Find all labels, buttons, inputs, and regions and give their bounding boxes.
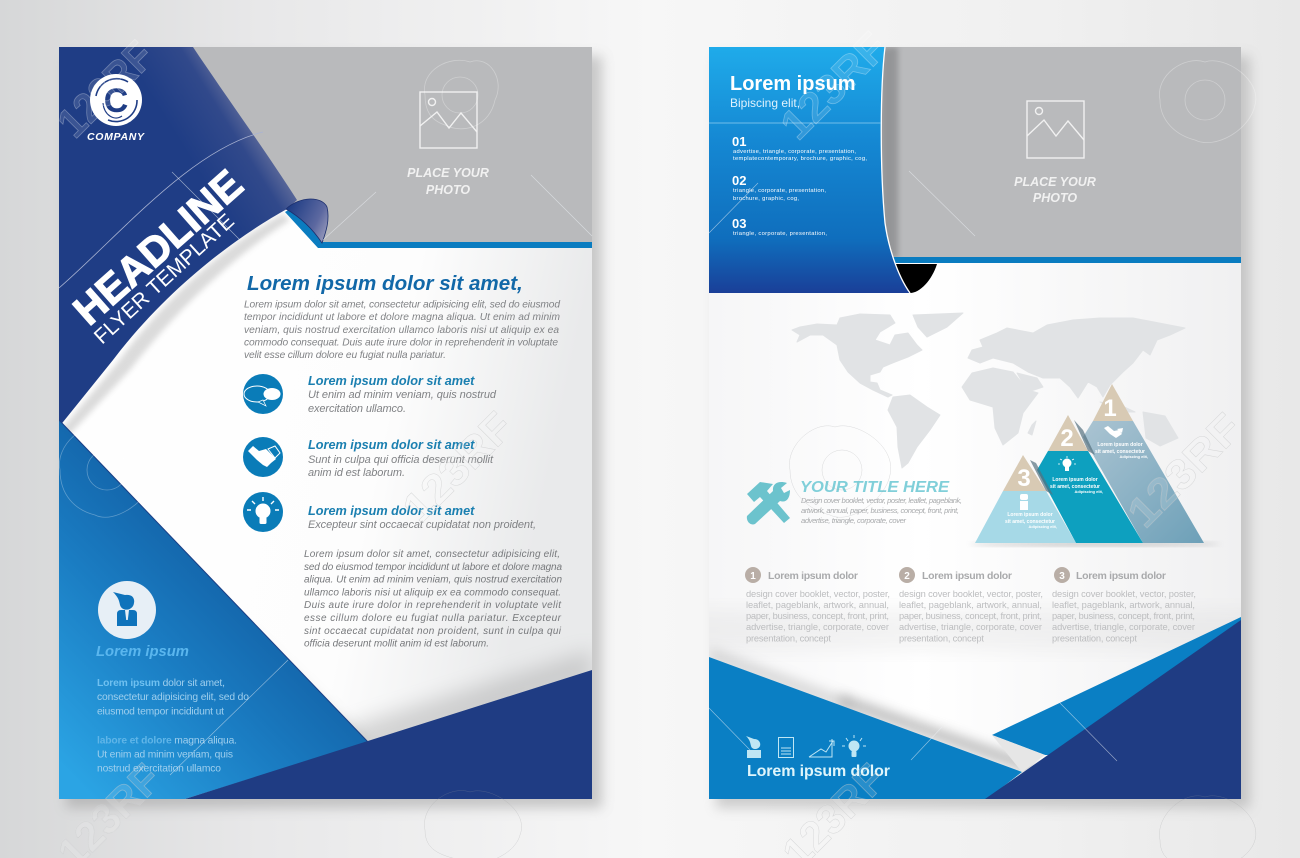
blue lower-left band: [709, 657, 1022, 799]
black fold: [892, 264, 937, 293]
intro paragraph: veniam, quis nostrud exercitation ullamco laboris nisi ut aliquip ex ea: [244, 325, 559, 336]
feature 3 text: Excepteur sint occaecat cupidatat non proident,: [308, 519, 536, 531]
lower-left text: [97, 678, 249, 774]
icon: speech bubbles: [243, 374, 283, 414]
pyramid 1: sit amet, consectetur: [1095, 449, 1145, 455]
pyramid 2: [1037, 415, 1143, 543]
photo caption: right: PLACE YOUR: [1014, 175, 1096, 189]
accent bar: right: [890, 257, 1241, 263]
photo caption: left: PLACE YOUR: [407, 166, 489, 180]
feature 2 text: Sunt in culpa qui officia deserunt mollit: [308, 454, 494, 466]
photo caption: right: PHOTO: [1033, 191, 1077, 205]
column 1: [745, 567, 890, 644]
bottom caption: Lorem ipsum dolor: [747, 763, 890, 780]
world map: [792, 313, 1185, 468]
lower-left text: labore et dolore magna aliqua.: [97, 736, 237, 746]
pyramid 3: sit amet, consectetur: [1005, 519, 1055, 525]
infographic title: YOUR TITLE HERE: [800, 479, 950, 496]
long paragraph: ullamco laboris nisi ut aliquip ex ea commodo consequat.: [304, 588, 561, 598]
column 3: advertise, triangle, corporate, cover: [1052, 622, 1195, 632]
photo placeholder icon: left: [420, 92, 477, 148]
feature 3 text: [308, 504, 536, 531]
fold edge: [881, 47, 910, 293]
column 3: Lorem ipsum dolor: [1076, 570, 1166, 582]
column 3: presentation, concept: [1052, 634, 1137, 644]
column 3: leaflet, pageblank, artwork, annual,: [1052, 600, 1195, 610]
watermarks: light background outline: 123RF: [1118, 404, 1250, 536]
intro paragraph: [244, 300, 560, 361]
column 3: 3: [1059, 571, 1065, 582]
icon: person: [98, 581, 156, 639]
blue lower-left panel: [59, 420, 368, 799]
header list: templatecontemporary, brochure, graphic, cog,: [733, 156, 867, 162]
feature 2 text: [308, 438, 494, 479]
long paragraph: aliqua. Ut enim ad minim veniam, quis nostrud exercitation: [304, 574, 562, 586]
headline: HEADLINE: [64, 161, 251, 334]
infographic description: artwork, annual, paper, business, concept, front, print,: [801, 506, 959, 515]
lower-left heading: Lorem ipsum: [96, 644, 189, 660]
photo caption: left: PHOTO: [426, 183, 470, 197]
long paragraph: [304, 549, 562, 650]
curl tip: [286, 199, 328, 243]
bottom edge shadow: [348, 649, 592, 741]
column 1: Lorem ipsum dolor: [768, 570, 858, 582]
pyramid 3: Adipiscing elit,: [1029, 524, 1057, 529]
left page shadow: [66, 56, 602, 808]
icon: tools: [747, 482, 790, 524]
column 3: paper, business, concept, front, print,: [1052, 611, 1195, 621]
header list: brochure, graphic, cog,: [733, 196, 799, 202]
logo: C: [104, 82, 128, 120]
panel: left flyer page: [59, 47, 592, 799]
intro paragraph: velit esse cillum dolore eu fugiat nulla pariatur.: [244, 350, 446, 361]
icon: light bulb: [243, 492, 283, 532]
intro paragraph: tempor incididunt ut labore et dolore magna aliqua. Ut enim ad minim: [244, 312, 560, 323]
pyramid 2: sit amet, consectetur: [1050, 484, 1100, 490]
blue header panel: [709, 47, 910, 293]
pyramid 2: 2: [1060, 425, 1074, 452]
header list: triangle, corporate, presentation,: [733, 231, 827, 237]
lower-left text: eiusmod tempor incididunt ut: [97, 706, 224, 718]
curl shadow: [59, 214, 290, 446]
navy lower-right panel: [185, 670, 592, 799]
column 2: presentation, concept: [899, 634, 984, 644]
blue wedge: [992, 617, 1241, 755]
feature 1 text: Lorem ipsum dolor sit amet: [308, 374, 475, 388]
curl line: [59, 132, 263, 288]
header subtitle: Bipiscing elit,: [730, 96, 800, 110]
navy folded corner: [59, 47, 297, 427]
fold shade: [992, 735, 1045, 772]
long paragraph: sed do eiusmod tempor incididunt ut labore et dolore magna: [304, 562, 562, 573]
long paragraph: sint occaecat cupidatat non proident, sunt in culpa qui: [304, 626, 562, 637]
blue triangle shadow: [230, 630, 372, 760]
pyramid 2: Adipiscing elit,: [1075, 489, 1103, 494]
bottom icons: [746, 735, 866, 758]
column 1: presentation, concept: [746, 634, 831, 644]
logo: [90, 74, 142, 126]
left band soft shadow: [709, 648, 850, 712]
column 2: 2: [904, 571, 910, 582]
feature 3 text: Lorem ipsum dolor sit amet: [308, 504, 475, 518]
feature 2 text: Lorem ipsum dolor sit amet: [308, 438, 475, 452]
blue panel edge line: [59, 420, 368, 742]
long paragraph: officia deserunt mollit anim id est laborum.: [304, 638, 489, 650]
column 2: advertise, triangle, corporate, cover: [899, 622, 1042, 632]
column 1: paper, business, concept, front, print,: [746, 611, 889, 621]
long paragraph: Duis aute irure dolor in reprehenderit in voluptate velit: [304, 600, 562, 611]
header divider: [709, 122, 881, 124]
column 3: design cover booklet, vector, poster,: [1052, 589, 1196, 599]
main heading: Lorem ipsum dolor sit amet,: [247, 272, 523, 295]
watermarks: 123RF: [48, 32, 163, 146]
pyramid shadow: [970, 542, 1220, 546]
pyramid 1: Adipiscing elit,: [1120, 454, 1148, 459]
feature 2 text: anim id est laborum.: [308, 467, 405, 479]
header list: triangle, corporate, presentation,: [733, 188, 826, 194]
header list: advertise, triangle, corporate, presentation,: [733, 149, 856, 155]
infographic description: [801, 496, 962, 525]
pyramid 3: [975, 455, 1076, 543]
lower-left text: Lorem ipsum dolor sit amet,: [97, 678, 225, 689]
left band shadow: [840, 695, 1040, 775]
column 1: advertise, triangle, corporate, cover: [746, 622, 889, 632]
icon: handshake: [243, 437, 283, 477]
watermarks: light background outline: 123RF: [393, 403, 522, 531]
lower-left text: consectetur adipisicing elit, sed do: [97, 692, 249, 703]
lower shadow wash: [709, 614, 1192, 646]
column 2: design cover booklet, vector, poster,: [899, 589, 1043, 599]
watermarks: 123RF: [1118, 404, 1250, 536]
company name: COMPANY: [87, 131, 145, 143]
header title: Lorem ipsum: [730, 73, 856, 95]
watermarks: 123RF: [771, 23, 896, 148]
column 2: Lorem ipsum dolor: [922, 570, 1012, 582]
navy lower-right band: [985, 620, 1241, 799]
long paragraph: Lorem ipsum dolor sit amet, consectetur adipisicing elit,: [304, 549, 560, 560]
header list: [732, 134, 867, 237]
photo panel: left: [180, 47, 592, 243]
infographic description: Design cover booklet, vector, poster, leaflet, pageblank,: [801, 496, 962, 505]
column 2: leaflet, pageblank, artwork, annual,: [899, 600, 1042, 610]
column 1: 1: [750, 571, 756, 582]
photo placeholder icon: right: [1027, 101, 1084, 158]
crop marks: [170, 171, 1117, 775]
column 2: [899, 567, 1043, 644]
watermarks: light background outline: [48, 403, 1256, 858]
photo caption: right: [1014, 175, 1096, 205]
intro paragraph: commodo consequat. Duis aute irure dolor in reprehenderit in voluptate: [244, 338, 558, 348]
pyramid 3: 3: [1017, 465, 1031, 492]
header list: 02: [732, 173, 746, 188]
header list: 03: [732, 216, 746, 231]
photo caption: left: [407, 166, 489, 197]
photo panel: right: [880, 47, 1241, 258]
feature 1 text: [308, 374, 497, 415]
pyramid 1: [1083, 384, 1204, 543]
column 3: [1052, 567, 1196, 644]
pyramid 3: Lorem ipsum dolor: [1007, 512, 1053, 518]
long paragraph: esse cillum dolore eu fugiat nulla pariatur. Excepteur: [304, 613, 562, 624]
infographic description: advertise, triangle, corporate, cover: [801, 516, 906, 525]
watermarks: 123RF: [393, 403, 522, 531]
pyramid 1: 1: [1103, 395, 1117, 422]
accent bar: left: [285, 207, 592, 248]
lower-left text: Ut enim ad minim veniam, quis: [97, 750, 233, 760]
feature 1 text: exercitation ullamco.: [308, 403, 406, 415]
intro paragraph: Lorem ipsum dolor sit amet, consectetur adipisicing elit, sed do eiusmod: [244, 300, 560, 310]
right page shadow: [716, 56, 1250, 808]
column 1: design cover booklet, vector, poster,: [746, 589, 890, 599]
column 1: leaflet, pageblank, artwork, annual,: [746, 600, 889, 610]
pyramid 1: Lorem ipsum dolor: [1097, 442, 1143, 448]
subheadline: FLYER TEMPLATE: [90, 209, 239, 349]
fold shadow: [880, 47, 898, 258]
feature 1 text: Ut enim ad minim veniam, quis nostrud: [308, 389, 497, 401]
pyramid 2: Lorem ipsum dolor: [1052, 477, 1098, 483]
header list: 01: [732, 134, 746, 149]
column 2: paper, business, concept, front, print,: [899, 611, 1042, 621]
lower-left text: nostrud exercitation ullamco: [97, 764, 221, 774]
panel: right flyer page: [709, 47, 1241, 799]
